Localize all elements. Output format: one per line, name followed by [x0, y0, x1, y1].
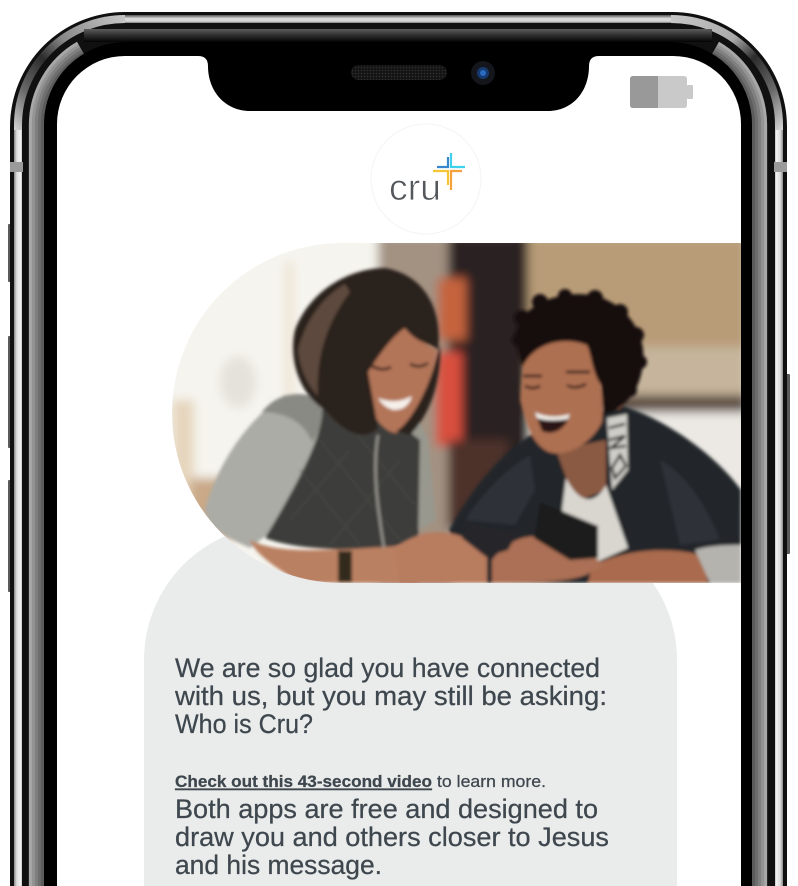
man — [395, 289, 741, 583]
man: ear — [614, 402, 627, 412]
intro paragraph: Who is Cru? — [175, 709, 313, 739]
man: hands — [492, 536, 605, 583]
woman: zipper — [376, 435, 384, 548]
man: curly hair — [512, 289, 647, 414]
woman: bracelet — [338, 551, 352, 582]
man: jacket — [449, 405, 741, 583]
woman: eyes and smile — [372, 363, 428, 369]
man: right arm — [588, 550, 708, 583]
text panel background — [144, 525, 677, 886]
woman: hair — [293, 268, 439, 435]
apps paragraph: Both apps are free and designed to — [175, 794, 598, 824]
man: face — [520, 340, 602, 453]
antenna bands — [10, 162, 787, 172]
speaker grille — [351, 65, 447, 80]
logo wordmark: cru — [389, 167, 441, 208]
intro paragraph — [174, 653, 607, 739]
woman: hand on phone — [395, 532, 487, 583]
apps paragraph: draw you and others closer to Jesus — [175, 822, 609, 852]
man: open mouth — [536, 417, 570, 434]
man: patterned cuff — [695, 545, 741, 583]
woman: forearm — [250, 540, 420, 583]
man: shirt — [562, 478, 628, 565]
icon: front camera — [471, 61, 495, 85]
woman — [205, 268, 440, 583]
woman: hood — [262, 394, 323, 442]
intro paragraph: with us, but you may still be asking: — [174, 681, 607, 711]
intro paragraph: We are so glad you have connected — [175, 653, 600, 683]
video link line: to learn more. — [437, 773, 546, 791]
blurred cafe background — [172, 243, 741, 583]
apps paragraph: and his message. — [175, 850, 382, 880]
woman: sleeve — [204, 410, 318, 550]
notch — [198, 56, 599, 111]
man: patterned collar — [607, 414, 628, 490]
logo: cru — [371, 124, 481, 234]
man: neck — [556, 440, 606, 502]
side buttons — [8, 224, 790, 592]
photo: two friends laughing at phones — [172, 243, 741, 583]
video link line: Check out this 43-second video — [175, 773, 432, 791]
apps paragraph — [175, 794, 609, 880]
phone near — [534, 502, 598, 560]
video link line — [175, 773, 546, 791]
man: eyes and brows — [523, 372, 590, 388]
body text — [174, 653, 609, 880]
woman: face — [365, 322, 436, 433]
woman: far sleeve — [410, 421, 435, 530]
phone far — [461, 534, 513, 558]
woman: quilted vest — [265, 405, 420, 550]
logo cross — [433, 153, 465, 190]
icon: battery — [630, 76, 693, 108]
